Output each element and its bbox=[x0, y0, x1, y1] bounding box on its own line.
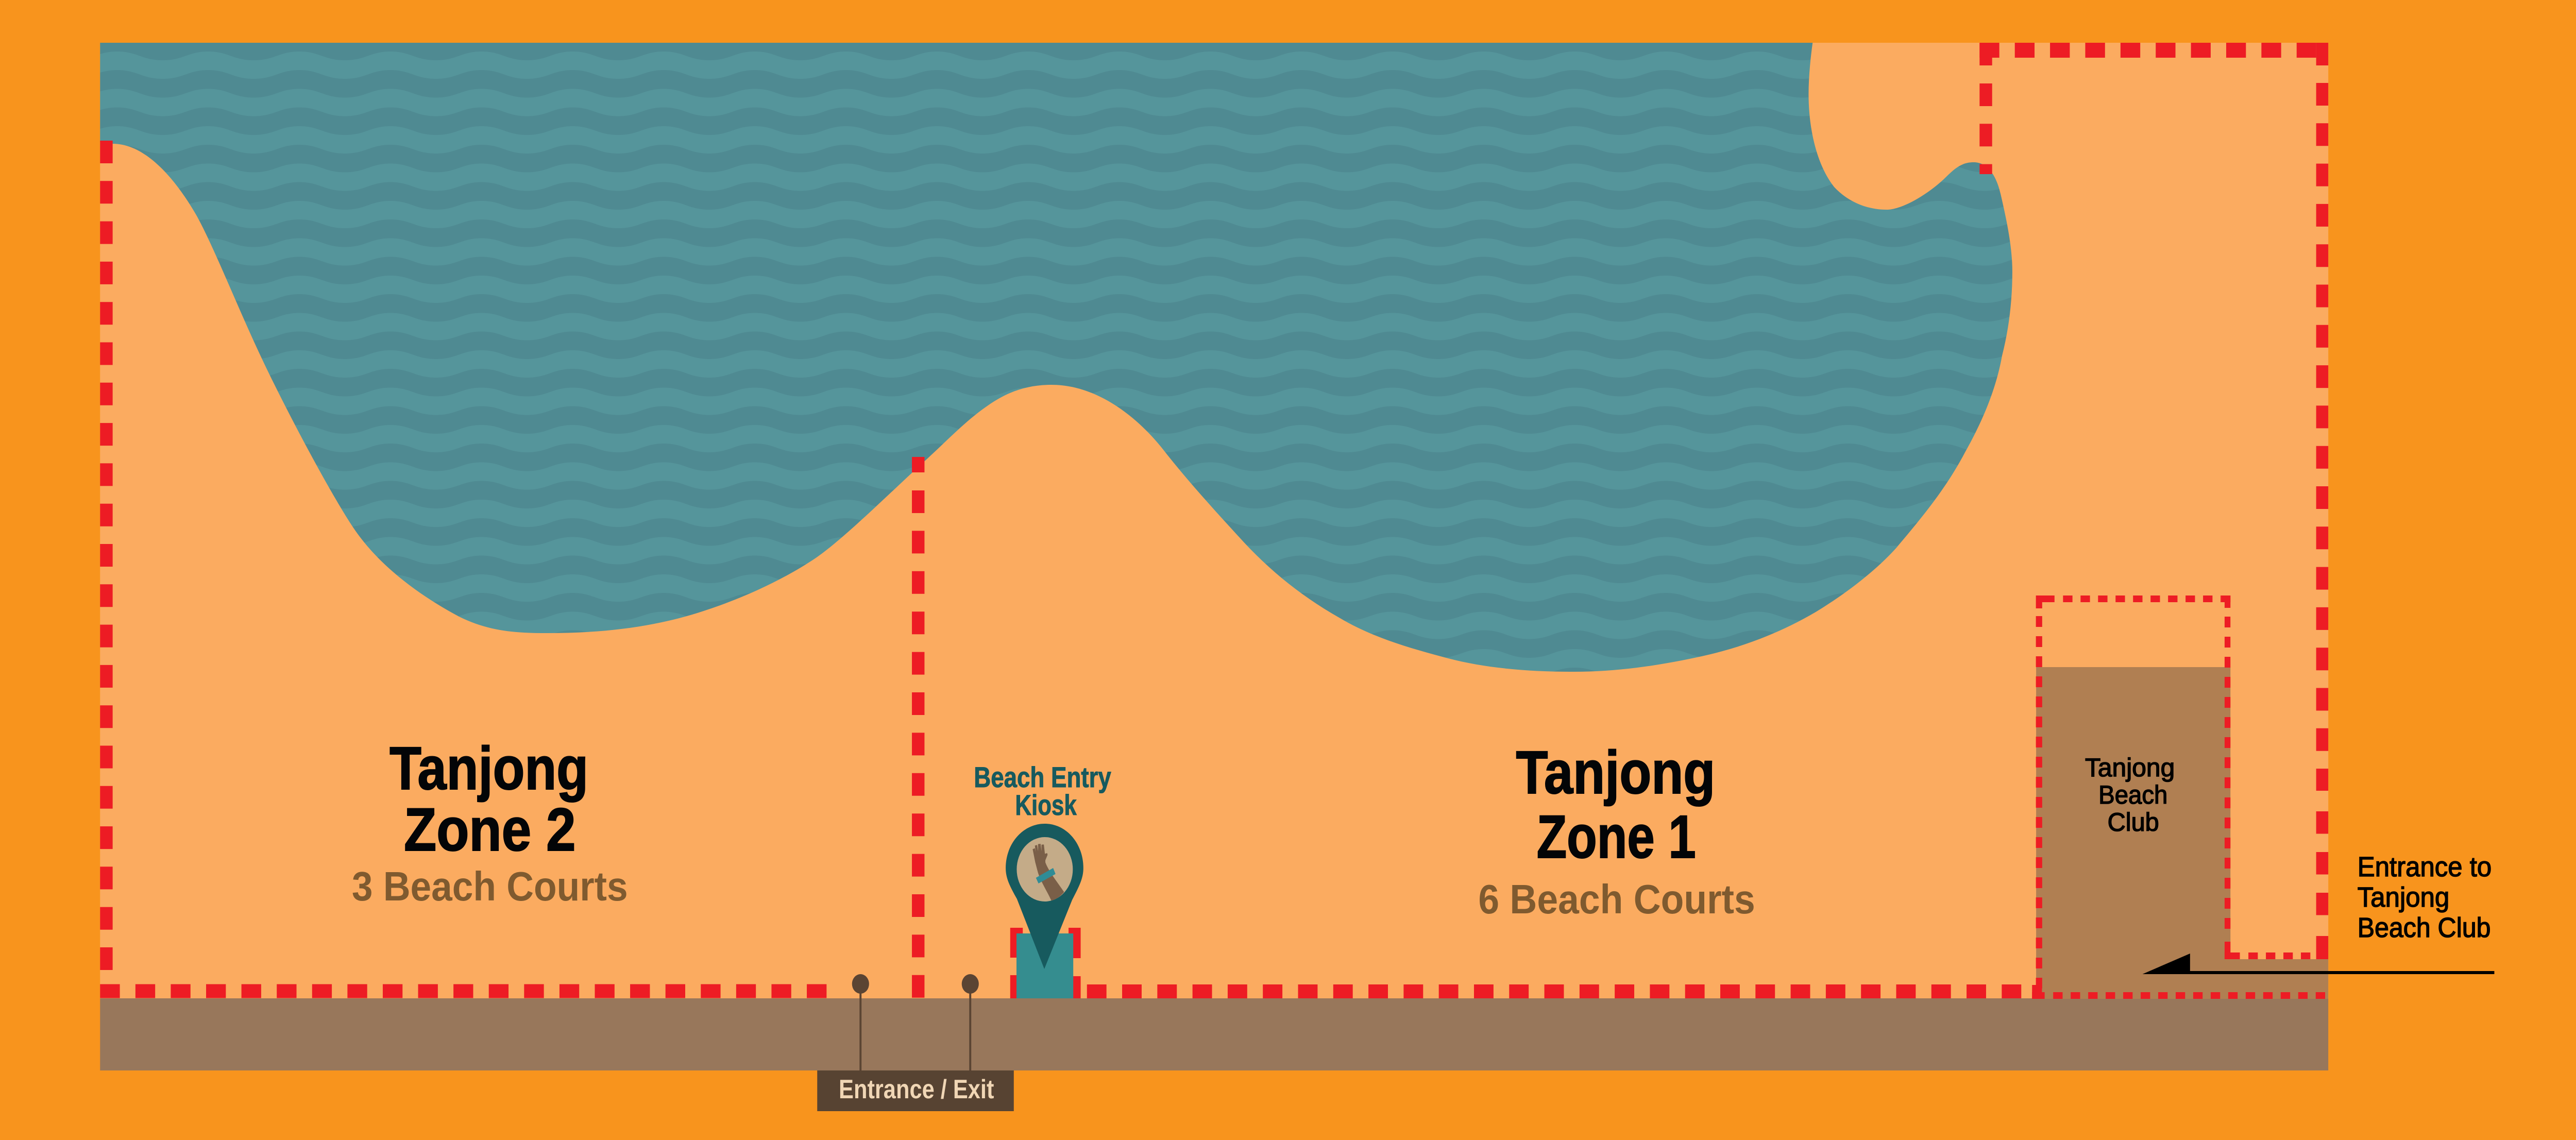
label: Beach Entry Kiosk: Kiosk bbox=[1015, 789, 1077, 822]
arrow: to Beach Club entrance bbox=[2143, 954, 2494, 974]
heading: Tanjong Zone 1: Tanjong bbox=[1516, 739, 1715, 807]
icon: entrance post right bbox=[962, 974, 979, 1070]
icon: entrance post left bbox=[852, 974, 869, 1070]
heading: Tanjong Zone 2: Tanjong bbox=[389, 735, 588, 803]
icon: kiosk location pin bbox=[1006, 824, 1083, 969]
heading: Tanjong Zone 1: Zone 1 bbox=[1537, 803, 1696, 871]
label: Entrance / Exit: Entrance / Exit bbox=[839, 1075, 994, 1104]
label: Entrance to Tanjong Beach Club bbox=[2358, 851, 2492, 943]
label: Tanjong Beach Club: Tanjong bbox=[2085, 753, 2175, 782]
label: Entrance to Tanjong Beach Club: Tanjong bbox=[2358, 881, 2449, 913]
heading: Tanjong Zone 2 bbox=[389, 735, 588, 864]
label: Tanjong Beach Club: Beach bbox=[2098, 780, 2167, 809]
red dashed zone boundaries bbox=[100, 43, 2328, 999]
panel: sea with waves bbox=[100, 43, 2012, 672]
label: Tanjong Beach Club: Club bbox=[2108, 808, 2159, 837]
panel: sand bbox=[100, 43, 2328, 999]
label: Beach Entry Kiosk: Beach Entry bbox=[974, 761, 1111, 794]
panel: road bbox=[100, 998, 2328, 1070]
label: Tanjong Beach Club bbox=[2085, 753, 2175, 837]
heading: Tanjong Zone 2: Zone 2 bbox=[404, 796, 576, 864]
label: Entrance to Tanjong Beach Club: Entrance to bbox=[2358, 851, 2492, 882]
text: 3 Beach Courts: 3 Beach Courts bbox=[352, 863, 628, 909]
kiosk building bbox=[1016, 933, 1073, 998]
label: Beach Entry Kiosk bbox=[974, 761, 1111, 822]
heading: Tanjong Zone 1 bbox=[1516, 739, 1715, 871]
label: Entrance / Exit bbox=[817, 1070, 1014, 1111]
text: 6 Beach Courts: 6 Beach Courts bbox=[1478, 876, 1755, 922]
label: Entrance to Tanjong Beach Club: Beach Club bbox=[2358, 912, 2490, 943]
panel: Tanjong Beach Club building bbox=[2036, 667, 2328, 999]
